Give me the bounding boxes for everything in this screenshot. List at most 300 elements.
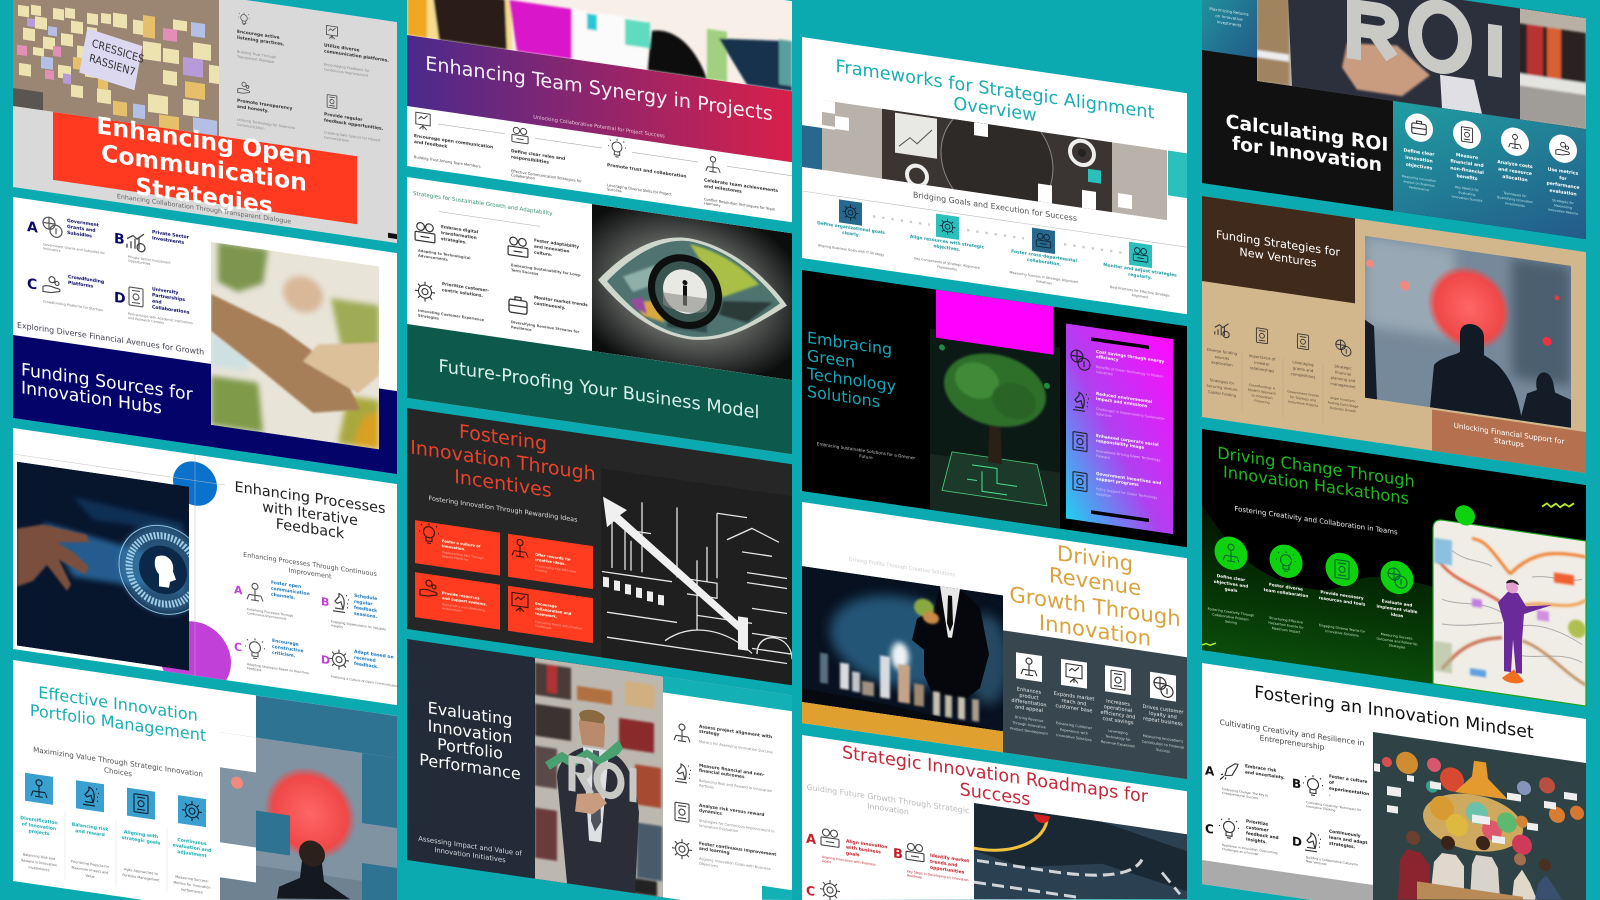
item 2: Effective Communication Strategies for (511, 169, 582, 184)
col 2: Key Metrics for (1455, 185, 1480, 193)
card 4: Motivating Teams with Creative (535, 620, 582, 631)
subtitle: Enhancing Collaboration Through Transparent Dialogue (117, 193, 291, 226)
item C (806, 879, 840, 900)
item 4 (672, 837, 776, 877)
col 4: Strategies for (1552, 198, 1575, 205)
col 1: product (1019, 693, 1039, 702)
col 3: grants and (1293, 365, 1314, 373)
step 4: Best Practices for Effective Strategic (1110, 285, 1170, 298)
item: listening (236, 11, 285, 66)
item D (321, 644, 399, 688)
title: Incentives (454, 465, 552, 502)
step 1 (817, 196, 885, 257)
subtitle: Entrepreneurship (1260, 733, 1325, 752)
step 3: Provide necessary (1320, 589, 1364, 601)
step 1: Collaborative Problem- (1212, 613, 1250, 622)
item 1 (414, 112, 505, 172)
col 4: Strategic (1334, 363, 1352, 371)
subtitle: Exploring Diverse Financial Avenues for Growth (17, 321, 204, 357)
step 2: Maximum Impact and (72, 866, 108, 875)
col 4: Success (1156, 748, 1170, 754)
card 3 (415, 572, 500, 630)
photo strip: targets on dark wall (802, 100, 1187, 220)
item B: Key Steps in Developing an Innovation (907, 869, 969, 882)
card 2: Encouraging Risk With Idea (535, 564, 576, 574)
gradient panel (1066, 324, 1173, 534)
photo: businessman over city (802, 566, 1003, 732)
step 2: Foster diverse (1269, 582, 1303, 592)
step 4 (1103, 238, 1177, 304)
slide: Enhancing Processes with Iterative Feedback (13, 428, 399, 723)
handwritten note: RASSIEN7 (88, 52, 136, 79)
subtitle: Enhancing Processes Through Continuous (243, 551, 377, 578)
col 1: exploration (1211, 359, 1233, 368)
col 3 (1287, 332, 1319, 408)
item B: Private Sector (152, 229, 190, 241)
col 3: for Startups and (1290, 395, 1316, 403)
step 2: Frameworks (937, 265, 957, 272)
item: transparency: Promote transparency (237, 98, 292, 112)
col 1: Performance (1409, 185, 1429, 192)
col 4 (1546, 132, 1580, 216)
col 3: Revenue Expansion (1101, 740, 1135, 749)
col 2: relationships (1250, 365, 1274, 374)
item C: customer (1246, 824, 1270, 834)
col 2: non-financial (1450, 165, 1484, 176)
slide: Enhancing Open Communication Strategies (13, 0, 397, 243)
step 2: objectives. (934, 243, 961, 253)
item: transparency: Communication (237, 123, 264, 131)
item 2: Portfolio (699, 784, 715, 790)
item B: opportunities (930, 865, 965, 876)
title: Strategies (135, 172, 273, 220)
item 3: responsibility image (1096, 438, 1144, 450)
white panel (663, 676, 792, 900)
item 3: Analyze risk versus reward (699, 803, 764, 818)
brown title block (1202, 196, 1355, 303)
col 4 (1328, 338, 1358, 414)
item B: Foster a culture (1329, 774, 1367, 785)
col 4: financial (1335, 369, 1351, 377)
photo: man with ROI letters (535, 658, 663, 897)
item 4: Objectives (699, 862, 718, 868)
col 4: for (1559, 175, 1567, 182)
item C: constructive (272, 644, 304, 654)
item 4 (1073, 468, 1161, 505)
item 2: Term Success (511, 268, 538, 276)
item 3: Enhanced corporate social (1096, 433, 1159, 447)
item C: feedback and (1246, 830, 1279, 841)
item B: sessions. (354, 611, 378, 620)
slide: Effective Innovation Portfolio Management (13, 660, 397, 900)
item B: B (114, 231, 125, 248)
col 3: operational (1104, 704, 1132, 714)
item A: Aligning Innovation with Business (822, 855, 876, 867)
col 3: cost savings (1103, 716, 1134, 726)
title: Innovation (1039, 611, 1151, 652)
item: feedback (324, 94, 384, 148)
item D: received (354, 655, 376, 664)
col 2 (1054, 658, 1094, 743)
item 4: support programs (1096, 476, 1139, 487)
subtitle: Unlocking Collaborative Potential for Project Success (533, 114, 665, 140)
item A: Align innovation (846, 838, 887, 850)
subtitle: Strategies for Sustainable Growth and Adaptability (413, 191, 553, 217)
sub band (1432, 410, 1586, 473)
col 1 (1010, 651, 1049, 736)
item A: Government (67, 218, 100, 229)
col 1 (1207, 320, 1238, 398)
item 2: responsibilities (511, 154, 549, 166)
step 3: resources and tools (1319, 595, 1366, 607)
item B (321, 588, 386, 635)
item 2 (511, 127, 602, 190)
item A: Embrace risk (1245, 763, 1277, 774)
title: Innovation (428, 716, 512, 747)
item 2: Balancing Risk and Reward in Innovation (699, 779, 772, 793)
slide: Calculating ROI for Innovation (1202, 0, 1586, 239)
item A: A (1205, 763, 1215, 779)
col 4: management (1330, 381, 1356, 390)
card 1 (415, 520, 500, 576)
card 2 (508, 534, 593, 589)
col 3: Leveraging (1292, 359, 1314, 367)
subtitle: Fostering Innovation Through Rewarding Ideas (429, 494, 578, 524)
item B: B (321, 595, 329, 609)
subtitle: Guiding Future Growth Through Strategic (807, 783, 969, 815)
step 2: Key Components of Strategic Alignment (914, 256, 981, 270)
title: Revenue (1049, 563, 1141, 601)
step 4: Performance (181, 888, 203, 895)
title: Innovation Hackathons (1223, 462, 1409, 508)
col 3: Increases (1106, 698, 1130, 708)
item 1: Benefits of Green Technology in Modern (1096, 365, 1164, 379)
item 2: impact and emissions (1096, 396, 1148, 408)
title: Fostering an Innovation Mindset (1254, 683, 1534, 743)
col 1: and appeal (1015, 704, 1043, 714)
item B: Innovative Thinking (1306, 804, 1336, 812)
item D (1292, 823, 1367, 872)
item C (234, 632, 309, 679)
title: Innovation Through (410, 436, 596, 486)
col 4: performance (1546, 180, 1580, 191)
item 3: Innovating Customer Experience (418, 309, 485, 322)
title: Portfolio (437, 734, 503, 763)
slide: Frameworks for Strategic Alignment Overview (802, 37, 1187, 314)
col 4: loyalty and (1149, 711, 1177, 721)
item 2: and innovation (534, 244, 569, 254)
title: Solutions (807, 382, 880, 411)
item 3 (675, 799, 775, 839)
photo: handshake over map (211, 242, 379, 450)
card 4: collaboration and (535, 607, 572, 616)
col 2: Importance of (1249, 353, 1276, 362)
col 4: planning and (1331, 375, 1356, 383)
step 2: Prioritizing Projects for (71, 859, 110, 869)
item 2: Solutions (1096, 412, 1112, 418)
step 3: Engaging Diverse Teams for (1319, 623, 1366, 634)
subtitle: Innovation Initiatives (434, 846, 506, 864)
card 2: creative ideas. (535, 558, 566, 566)
col 1: Capital Funding (1208, 390, 1236, 398)
item D: strategies. (1329, 841, 1356, 850)
step 1: Reward in Innovation (21, 858, 57, 867)
step 4: Strategies (1389, 643, 1406, 650)
col 1: differentiation (1011, 698, 1047, 709)
green band (407, 324, 792, 454)
card 2: Offer rewards for (535, 553, 571, 562)
title: Enhancing Team Synergy in Projects (425, 52, 773, 125)
title: New Ventures (1239, 246, 1317, 270)
item 4: Adoption (1096, 492, 1111, 498)
step 1: Aligning Business Goals with IT Strategy (818, 243, 884, 257)
title: Evaluating (428, 698, 512, 729)
title: Enhancing Open (96, 111, 312, 171)
title: Frameworks for Strategic Alignment (836, 56, 1154, 123)
item D: D (114, 290, 126, 307)
photo: sticky note wall (13, 0, 219, 136)
col 3: Technology for (1104, 734, 1131, 742)
subtitle: Choices (104, 765, 132, 778)
item 1: Metrics for Assessing Innovation Success (699, 740, 773, 754)
col 4: Contribution to Financial (1142, 740, 1184, 750)
item C: insights. (1246, 836, 1267, 846)
title: Driving (1057, 541, 1133, 577)
item 4: Resilience (511, 325, 532, 332)
step 2: Maximum Impact (1272, 626, 1301, 634)
photo: eye (592, 204, 792, 380)
title: Effective Innovation (38, 683, 198, 725)
item 4: continuously. (534, 301, 566, 310)
title: Calculating ROI (1226, 111, 1388, 156)
step 1: objectives and (1214, 579, 1248, 589)
slide: Evaluating Innovation Portfolio Performance (407, 639, 792, 900)
step 4: adjustment (177, 849, 208, 859)
item: listening: Building Trust Through (237, 50, 276, 59)
item 3: Leveraging Diverse Skills for Project (607, 183, 672, 197)
item 1 (1071, 345, 1165, 384)
item 3: Prioritize customer- (442, 281, 489, 293)
item C: Adapting Strategies Based on Real-Time (247, 662, 309, 675)
photo: chalk line drawing (601, 496, 792, 686)
green dot (1455, 504, 1475, 527)
item 4: Harmony (704, 201, 721, 208)
item 2: Collaboration (511, 173, 535, 181)
slide: Future-Proofing Your Business Model (407, 177, 792, 454)
item D: D (1292, 834, 1302, 850)
item D: feedback. (354, 661, 379, 670)
item A: Foster open (271, 580, 301, 590)
item A: Goals (822, 859, 831, 864)
note text: Investments (1217, 19, 1241, 28)
col 4: Use metrics (1548, 166, 1579, 177)
step 3: Foster cross-departmental (1011, 249, 1077, 264)
item C: C (27, 276, 37, 294)
item 1: Assess project alignment with (699, 724, 772, 740)
col 4 (1142, 671, 1184, 756)
item C: C (234, 640, 242, 654)
subtitle: Cultivating Creativity and Resilience in (1220, 718, 1365, 748)
item B: Investments (152, 235, 184, 246)
col 2: Measure (1456, 152, 1478, 161)
col 4: Measuring Innovation's (1143, 734, 1183, 744)
item 3 (607, 137, 698, 204)
title: Growth Through (1009, 582, 1181, 632)
item 4: Foster continuous improvement (699, 841, 776, 858)
item D (114, 281, 193, 329)
item 1: transformation (441, 230, 477, 240)
title: Technology (806, 364, 896, 396)
col 1: Measuring Innovation (1402, 174, 1436, 183)
step 1: Balancing Risk and (23, 852, 55, 861)
item A: A (806, 832, 817, 848)
item 4: Conflict Resolution Techniques for Team (704, 197, 776, 212)
slide: Enhancing Team Synergy in Projects (407, 0, 792, 222)
step 3: collaboration. (1027, 257, 1061, 268)
slide: Embracing Green Technology Solutions (802, 270, 1187, 547)
item B: Opportunities (128, 259, 151, 266)
slide: Fostering an Innovation Mindset (1202, 663, 1586, 900)
col 1: Securing Venture (1207, 384, 1238, 392)
step 1 (20, 772, 58, 874)
step 2: Value (85, 874, 95, 879)
step 2 (1264, 541, 1308, 636)
col 3: Leveraging (1108, 729, 1128, 736)
col 3: Innovative Projects (1288, 400, 1318, 408)
step 3: Measuring Success in Strategic Alignment (1009, 270, 1079, 284)
grey footer (1202, 860, 1373, 900)
col 3: Investments (1505, 201, 1525, 208)
item B: regular (354, 599, 373, 608)
step 3 (122, 787, 161, 883)
item D: Building a Collaborative Culture for (1306, 855, 1359, 867)
slide: Funding Strategies for New Ventures (1202, 196, 1586, 473)
item C: Prioritize (1246, 818, 1268, 828)
step 1: projects (28, 828, 50, 837)
item B: B (893, 846, 903, 863)
card 1: innovation. (442, 544, 466, 552)
item D: D (321, 653, 330, 667)
step 4: implement viable (1376, 603, 1418, 614)
col 2: financial and (1450, 158, 1484, 169)
step 3 (1319, 550, 1366, 639)
item D: learn and adapt (1329, 835, 1367, 846)
item 3: Innovation Evaluation (699, 824, 738, 833)
item 2: Measure financial and non- (699, 763, 765, 778)
item A: Enhancing Processes Through (247, 607, 293, 618)
note text: Maximizing Returns (1209, 6, 1249, 17)
step 3 (1009, 224, 1079, 289)
card 2: Funding (535, 568, 547, 573)
title: Green (807, 346, 855, 372)
card 4: Challenges (535, 624, 552, 630)
item C: C (1205, 821, 1214, 837)
title: Portfolio Management (30, 701, 206, 745)
subtitle: Driving Profits Through Creative Solutions (849, 557, 956, 578)
title: Innovation Hubs (21, 378, 162, 419)
title: for Innovation (1232, 132, 1382, 176)
col 3: Quantifying Innovation (1497, 195, 1533, 204)
item D: and Research Centers (128, 316, 164, 325)
item B (893, 841, 970, 887)
item: platforms: Continuous Improvement (324, 67, 369, 78)
card 3: Recognizing and Celebrating (442, 602, 485, 612)
magenta block (936, 290, 1053, 355)
item: platforms: communication platforms. (324, 48, 389, 64)
item 2: Reduced environmental (1096, 391, 1153, 404)
item B: Cultivating Creativity: Techniques for (1306, 800, 1362, 812)
col 4: Maximizing (1554, 203, 1572, 210)
item: platforms: Utilize diverse (324, 42, 359, 54)
item B: Roadmap (907, 873, 922, 880)
item 3: Promote trust and collaboration (607, 162, 686, 180)
item D: Collaborations (152, 304, 190, 316)
item C (27, 268, 104, 312)
step 1: Define organizational goals (817, 220, 885, 236)
col 4: Fueling Early-Stage (1328, 400, 1358, 409)
item D: Partnerships (152, 292, 185, 303)
step 1 (1208, 533, 1254, 628)
photo: tree on circuit board (930, 329, 1060, 529)
item A: channels. (271, 592, 296, 601)
slide: Funding Sources for Innovation Hubs (13, 197, 397, 474)
col 2: benefits (1456, 173, 1478, 182)
subtitle: Bridging Goals and Execution for Success (913, 190, 1077, 223)
navy band (13, 335, 397, 474)
item 2: Define clear roles and (511, 148, 565, 162)
note text: on Innovative (1215, 13, 1243, 22)
item: platforms: Encouraging Feedback for (324, 62, 370, 73)
item B: . (1329, 793, 1331, 798)
photo: hand holding ROI letters (1257, 0, 1586, 129)
item B: Schedule (354, 593, 377, 602)
item 3 (1073, 430, 1160, 467)
item 4: Monitor market trends (534, 295, 588, 307)
card 4: Encourage (535, 602, 557, 609)
item D: Fostering a Culture of Open Communication (331, 674, 399, 688)
item 2: financial outcomes (699, 768, 745, 780)
col 1: Through Innovative (1011, 721, 1046, 730)
photo panel: red sphere and man (220, 695, 397, 900)
item 1 (415, 220, 479, 266)
title: Success (960, 780, 1030, 810)
col 1: Driving Revenue (1015, 715, 1043, 723)
subtitle: Unlocking Financial Support for (1454, 421, 1564, 446)
handwritten note: CRESSICES (91, 37, 145, 66)
item A: and uncertainty. (1245, 769, 1285, 781)
item C: Platforms (68, 280, 93, 290)
item 3: dynamics (699, 808, 722, 817)
col 2: Experience with (1060, 728, 1088, 736)
item A: A (27, 219, 38, 237)
title bar (53, 112, 357, 224)
item B: Private Sector Investment (128, 255, 171, 265)
step 1: of Innovation (22, 821, 56, 832)
item C: Crowdfunding Platforms for Startups (43, 299, 103, 312)
step 4: Measuring Success: (1381, 632, 1413, 641)
slide: Fostering Innovation Through Incentives (407, 408, 792, 685)
squiggle (1542, 499, 1574, 511)
handwritten note (79, 28, 146, 91)
slide: Driving Revenue Growth Through Innovation (802, 502, 1187, 779)
card 3: and support systems. (442, 596, 488, 607)
col 3: Analyze costs (1497, 159, 1533, 170)
item 1: and feedback (414, 139, 448, 150)
col 3: and resource (1498, 166, 1532, 177)
item: feedback: Creating Safe Spaces for Honest (324, 130, 381, 143)
item 2: culture. (534, 250, 553, 257)
item C: Challenges as a Founder (1222, 847, 1259, 856)
